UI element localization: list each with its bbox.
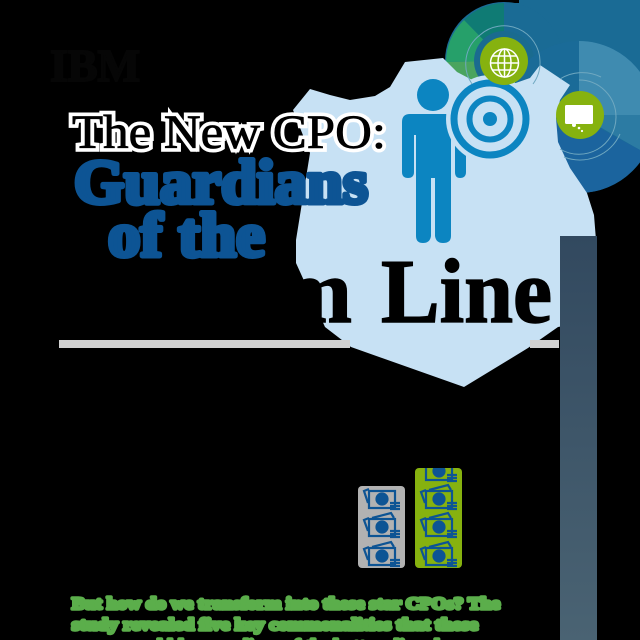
green intro paragraph: But how do we transform into these star CPOs? The <box>72 594 500 613</box>
heading: Guardians: Guardians <box>74 149 368 217</box>
heading: The New CPO: The New CPO: <box>72 106 386 159</box>
icon: globe on green circle <box>466 26 540 85</box>
icon: person <box>402 79 466 243</box>
shield <box>293 58 596 387</box>
heading: Bottom Line: Bottom <box>64 241 352 342</box>
background graphic: blue and green discs <box>445 0 640 193</box>
heading: Bottom Line: Line <box>381 241 552 342</box>
icon: target <box>446 75 534 163</box>
green intro paragraph: study revealed five key commonalities that these <box>72 615 479 634</box>
green money stack <box>415 463 462 568</box>
bills <box>421 463 457 566</box>
icon: speech bubble on green circle <box>556 73 620 160</box>
green intro paragraph <box>72 594 500 640</box>
bills <box>364 489 400 566</box>
dark vertical bar <box>560 236 597 640</box>
IBM logo: IBM <box>50 40 140 91</box>
heading: Bottom Line <box>64 241 552 342</box>
grey money stack <box>358 486 405 568</box>
heading: of the: of the <box>108 202 265 270</box>
heading: The New CPO: The New CPO: <box>72 106 386 159</box>
grey divider rule <box>59 340 559 348</box>
